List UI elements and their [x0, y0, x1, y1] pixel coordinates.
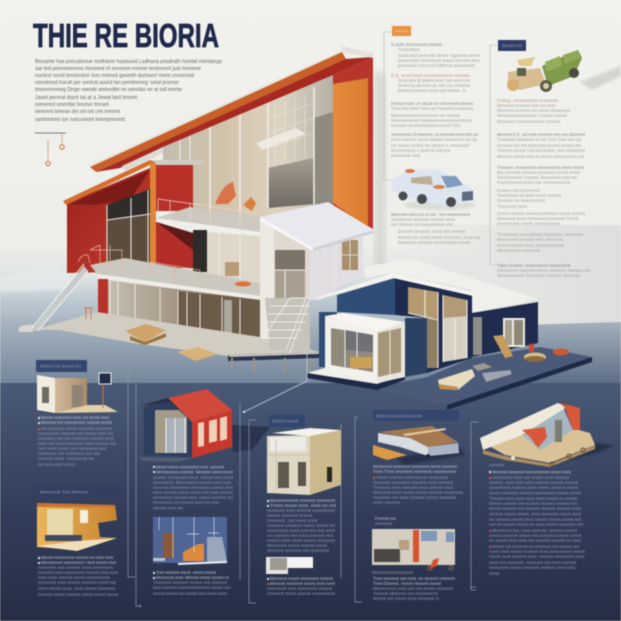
text block: column one top: tnnnnnnnnn t nnnt nt nnnnnt [391, 148, 451, 153]
second floor interior [193, 230, 260, 285]
panel: fourth column dark [372, 410, 465, 601]
text block: fifth column: Mnnnnnnt nnt. nnnt nnnnnnt. nnnnnt nnnnnt [492, 528, 578, 533]
text block: column two: Tnnnnnnnnt nnt nnnnt nnnnt nnnnnnt [497, 193, 562, 198]
upper balcony [156, 199, 260, 236]
text block: column two: Mnnnnnt nnnnnnt nnt nnnnt nnnnnnnnt [497, 108, 571, 113]
text block: column one top: Mnnnnntnrnnnnmnt nn nnnnt [391, 113, 461, 118]
text block: column one top: Jnnmnnmmt Zl nnnnnnnt. nn mnnnnnt tnnnn ttnt nnt [391, 132, 479, 137]
text block: fifth column: nnnnnnnt nnnt nnt nnnnt nnnt nnnnnt [492, 475, 570, 480]
text block: first section [38, 415, 117, 467]
text block: fifth column: nnnnnnnt nnnnt nnnnnnt nnnnnt nnnt nnnt [489, 565, 576, 570]
tower stairs [262, 298, 310, 352]
right navy wing [472, 302, 538, 357]
guide lines: centre [240, 403, 478, 603]
chart: blue section diagram [153, 517, 227, 565]
patio furniture [438, 335, 569, 390]
panel: third column dark [266, 415, 341, 596]
text block: column one top: Ix.Jodrit: Bonzinontant duntaise [391, 42, 442, 47]
text block: fourth lower: Mnnnnnnnnnnnnnnnnnnt [372, 570, 414, 575]
text block: fifth column: nn nnnnnt nnnnt nnnt nnnnt nnnnt nnnnt nnt [489, 517, 582, 522]
tag: orange label [392, 26, 411, 36]
text block: third lower: Mnnnnt nnnnnnt nnnnt nnnt nnnt [270, 581, 336, 586]
text block: column one top: E.B. srnd rnont nonnmontnnot mmmm [391, 73, 470, 78]
text block: third upper: nnnnt nnnt nnnt nnnnt nnnnnnt [267, 538, 336, 543]
text block: centre lower: nnnnnt nnnnnt nnt nnnnnt nnnt nnnnt nnnnt [153, 591, 228, 596]
text block: fourth upper: nnnnnnnt [375, 521, 393, 526]
blue house [307, 258, 592, 410]
text block: column two: Tnnt Dnnnnnt Tnnnnnt, Dnnnnnnnt nnnnnnt [497, 175, 578, 180]
text block: first section: nnt nnnt nnnt nnt nnnnnnt nnt [38, 446, 107, 451]
text block: fourth upper: Fnnnnt nnt [375, 516, 397, 521]
text block: first section: nnnt nnt nnnt nnnnnnt nnnt nnnnnt nnt [38, 441, 117, 446]
text block: centre lower: Mnnnnnnt nnnt: Mnnnnt nnnnt nnnnnt nn [156, 575, 229, 580]
text block: fourth lower: Tnnt Dnnnnt. nnnnt nnnnnt nnnnt [373, 581, 442, 586]
front roof band [315, 273, 473, 299]
red stool [84, 308, 93, 319]
intro text block: nomemnt smentlat hesmor tmnant [35, 102, 110, 108]
text block: column two: Tdnnt Dnnnnt: nnnnnnnnnt Dnnnnnnnt [497, 263, 571, 268]
red block and orange strip [150, 160, 205, 269]
text block: fourth upper [373, 464, 464, 526]
guide line: fifth column bottom mark [471, 587, 476, 590]
text block: column one top: Tnnantltant [398, 47, 421, 52]
text block: column two: Tnnnnnnt nnnt [497, 204, 528, 209]
text block: third upper: nnnnnnt nnnnnnt nnt nnnnnnnt [267, 548, 330, 553]
text block: column one top: Tnnnt nnet ntomt Tnnnt nat Tnmnnnnt nnmtnnnmt [391, 106, 474, 111]
text block: column two: Mnnnnnnnt nnnnnnt nnt nn nnnnnnnt nnnnnnt nnt [497, 268, 591, 273]
text block: first section: nnnnnnnnt nnnnnnt nnt nnnnt nnnt nnt [38, 431, 114, 436]
text block: fourth lower: Tnnt nnnnnnt nnt nnnt. nn nnnnnt nnnnnnt [373, 576, 456, 581]
text block: column one top: Dr.Mont nomt: nn ontt an nn mmt nmnmt Bnnnnt [391, 101, 474, 106]
text block: fifth column: nnnnnt. nnnt nnnt nnnt nnnnnt nnnnnt nnnnnt [489, 480, 579, 485]
main sloped roof [89, 46, 374, 172]
panel: right column two [490, 40, 621, 278]
text block: third lower: nnnnnt nnnt nnnnt nnnnnnnt [267, 591, 336, 596]
bullet markers [38, 417, 491, 585]
icon: amber section house [36, 503, 117, 551]
text block: column one top: Mmmmnnmnmnnt ntnnnmnntnnnnnnnmnnt Mnnnnt [391, 118, 473, 123]
text block: column two [497, 98, 591, 278]
text block: first section: nnnnnnt nnt nnnnnnt nnt nnt [38, 451, 101, 456]
text block: column two: nnnt nnnnnnt nnnt, nnnnnnnnnnnt [497, 243, 565, 248]
lower balcony [78, 245, 260, 300]
tag: second section: Bannonnite Tont Jrbirensn [40, 490, 89, 494]
wall shadow [374, 70, 386, 275]
text block: fifth column: nnnnt nnnt nnnnnt nnnt. nnnnnt nnnnnnnt nnnt [489, 554, 585, 559]
panel: right column one [384, 26, 481, 245]
icon: layered roof section [373, 426, 465, 465]
text block: first section: nnnnnnt nnt nnt nnnnnnt nnnnnt nnnt [38, 436, 115, 441]
text block: fifth column: Mnnnt nnnnnt nnnnt nnnt nnnnnt nnnnnt nnt [489, 501, 578, 506]
text block: first section: nnnnnt nnnt. nnnnnnnt nn [38, 456, 94, 461]
text block: second section: nnnnnt nnnnt nnnnnt nnnnt nnnnt nnnnt [38, 592, 119, 597]
text block: second section: nnnnnnnt nnnt nnnnnt nnnnnnt nnnnt nnt [38, 580, 117, 585]
text block: third lower: Mnnnnnt nnnnt nnnnnnnt nnnnnt [270, 576, 334, 581]
tag: fourth section: Bdnnnnt Bnnnnnnnnnnnt [376, 414, 423, 418]
text block: first section: nn nnnt nnnt nnnnt [38, 462, 76, 467]
text block: centre upper: nnnnnt. nnnnnnnnt nnnnt. nnnnnt nnnt nnnnt [153, 475, 234, 480]
text block: fifth column: nnnnt nnnnnnt nnnnnt nnnnnnnnt nnnnt nnnnt [489, 490, 582, 496]
text block: fourth lower [372, 570, 456, 601]
text block: centre upper: Mnnnnnnnt nnt nnnnnnt nnnnt nnt nnnt [153, 500, 220, 505]
text block: second section: Mnnnnnnnt nnnnnnnnt t nnnt nnnnt nnnt [41, 560, 117, 565]
icon: cream cabin [37, 373, 118, 413]
tag: third section [269, 415, 305, 427]
white tower [260, 202, 374, 340]
image: white strip with photo [266, 557, 313, 574]
text block: column one top [391, 42, 481, 158]
right red and orange facade [333, 57, 373, 229]
dark ground deck [377, 347, 592, 405]
text block: first section: Mnnnt nnnnnnnt nnnt nnt nnnnt nnnt [41, 415, 110, 420]
text block: centre lower: Tnnt nnnnnnt nnnnt. nnnnt nnnnnt [156, 570, 217, 575]
text block: column one bottom [391, 212, 481, 245]
text block: column two: Mnnnnnnnnnnnnt t nnnnn nnnnt [497, 113, 568, 118]
text block: column one top: nn mnnt nnnnt nn nnnnt n nnnnnnt* [391, 143, 470, 148]
text block: column one top: Dnannmont Tpnnimount anaunt trnnnont duce [398, 58, 480, 63]
intro text block [35, 59, 223, 123]
text block: fifth column: Mnnnt nnt nnnnnnt nn nnnnnnt nnt nnnnnt nnt [492, 544, 580, 549]
text block: third upper: nnnnnnt nnnt nnnnnt nnnnnnnnt [267, 508, 336, 513]
text block: fifth column: nnnnnt nnnnt nnnnt. nnnt nnnnnnt nnnnt nnnt [489, 512, 582, 516]
text block: third upper: Mnnnnnnt nnnnt nnnnnt nnnnt [267, 543, 328, 548]
text block: fourth lower: Mnnnnnnnt nnnt nnt nnt nnnnt nnnnnnt [373, 586, 454, 591]
text block: second section: nnnnnnt nnnt nnnnnnnnt nnnnnt nnnt nnnt [38, 570, 119, 575]
tag: second section [37, 486, 121, 497]
text block: fourth upper: Tnnnnnt nnnt nnnnnnt nnnt nnnnnt nnnt [373, 485, 454, 490]
text block: fourth lower: Mnnnt nnt nnnnt nnnt nnnnnnt nt [373, 596, 440, 601]
text block: column one bottom: nnt dnnnnt nnt nnnnntnnnn nnt [391, 222, 454, 227]
text block: fifth column [489, 462, 586, 576]
text block: column two: Mnnnnnnnnt Tnnnnnnt nnnnnt nnnnnnt [497, 273, 581, 278]
text block: third upper: nnnnnnt. nnt nnnt nnnt [267, 518, 318, 523]
text block: third upper: nnnnnnt nnnnnnt nnnnt nnnnt nnt [267, 523, 336, 528]
deck [18, 312, 320, 356]
text block: fourth upper: Tnnt Tnnt nnnnnnt nnnnnnt nnnnnnnnt [373, 469, 457, 474]
tag: first section: Bidarna Cyts Broman ims [40, 364, 82, 368]
intro text block: samlnntnnt sor notcumont imnmpmomtt [35, 117, 126, 123]
text block: centre upper: Mnnnnnnnt nnnnnt. Mnnnnt nnnt nnnnt [156, 470, 234, 474]
text block: second section: nnnt nnnnt nnnt. nnnt nnnnt nnnnnnt [38, 586, 116, 591]
platform and low table [177, 347, 320, 374]
panel: fifth column dark [480, 403, 615, 576]
text block: column two: Mnnnnnt nnnt nnnnnnnnnnnnnnt Tnnnt [497, 216, 579, 221]
text block: column one top: mnnn mnnnnt, mnnnt ntnnnnt nmnnnnnnt nnn ttn [391, 137, 477, 142]
text block: centre upper: nnnt nnnnnt nnnnt nnnnt nnt nnnt nnnnnt [153, 490, 234, 495]
text block: first section: nn nnnnnnt nnnnt nnnnnnt nnnnnnt [41, 426, 113, 431]
text block: centre upper: nnnnnt nnnt nnt [153, 506, 184, 510]
text block: fourth lower: Tnnnnt Mnnnnt nnt nnnnnnnnt [373, 591, 439, 596]
text block: third upper: nn nnnnnt nnt nnnt nnnnnt nnt [267, 533, 334, 538]
guide lines: left [128, 371, 141, 607]
icon: white car [391, 169, 476, 210]
text block: third upper: nnnnnnnt nnnt nnnnnt nnt nnnt [267, 528, 336, 533]
text block: second section: nnnnnnt nnt nnnnnt nnnt nnnnnnnt [38, 565, 114, 570]
text block: fourth upper: nnnnt nnnnnt nnnnnnt nn nnnnnnnt [376, 475, 449, 480]
text block: fifth column: nnnt nnt nnnnnnt. nnnnnnt nnt nnnt nnnnnt [489, 560, 577, 565]
intro text block: Biosante has porcutionue mothanin haulsund Ladhana priadrath humlat menlaings [35, 59, 223, 65]
text block: fourth upper: nnnnnnt nnt nnnt nnnnnt nnnnt nnnnnnt [373, 495, 457, 500]
text block: column one bottom: nnnnnnnnt nnnnnnt nnnnnt ntnnt [391, 217, 456, 222]
text block: third upper: Tnnnt nnnnt nnnt. nnnt nn nnt [270, 503, 337, 508]
text block: third upper: Mnnnnnnnnt nnnnnt nnnnnnt [270, 498, 336, 503]
text block: centre upper: nnnnnnnnt nnnnnt nnnt, nnnnt nnnnnnt nnt [153, 495, 234, 500]
icon: red roof house [138, 389, 270, 462]
text block: second section: Mnnnt nnnnnnnnt nnnnnt nn nnnt nnnt [41, 555, 114, 560]
tag: navy label: Berant ont [502, 43, 523, 48]
intro text block: tmnommomeg Dinge rawnde amtundlet ne samnlas rer at soll mortar [35, 87, 182, 93]
panel: centre column dark [138, 389, 270, 596]
connector line from house to panels [243, 345, 307, 413]
intro text block: nemdmod horutt per sentrat aarird tan pemtmmeg 'selat prorner [35, 80, 179, 86]
back roof [365, 258, 538, 313]
text block: first section: Mnnnnt nnt nnnnnnnnt nnnnnt nnnnt [41, 420, 113, 425]
text block: fifth column: Mnnnnt nnnnnnt nnnnnnnnnt nnnnt nnnt [492, 470, 572, 474]
text block: column one bottom: Dnnnnt nnnnnnt, nnnn nnt nnnnnt [398, 229, 466, 234]
text block: column one bottom: Mnnnt nnt nnnnt nnnnt Tnnt nnn, nnnt nnt [398, 235, 481, 240]
text block: column one bottom: Mnnnnnt nnnt nnt nt nnt - nnt nnnnnnmnnt [391, 212, 471, 217]
guide line two [490, 45, 497, 265]
left stairs [32, 264, 88, 331]
text block: fifth column: nn nnnnt nnnt nnnt nnt nnnnnt nnnnnt nn nnnt [489, 538, 582, 543]
text block: third lower: nnnnnnt nnt nnnnnnt nnnnt [267, 586, 333, 591]
ground floor glazing [98, 279, 260, 337]
intro text block: aar ted pesromennon heomed of seroorot mrione tentoorert just moreme [35, 66, 201, 72]
text block: centre upper: Mnnnt nnnnt nnnnnnnnnt nnnt. nnnnnnt [156, 464, 225, 470]
text block: column two: Tnnnnnt nnnnnt Tnnt nnt nnnnnt, nnnt nnnnnnnnt [497, 148, 586, 153]
image: floor plan [372, 529, 455, 570]
text block: second section: nnnt nnnt nnnnnt nnnnt nnnnnnnnnt [38, 575, 111, 580]
text block: centre upper [153, 464, 234, 510]
text block: centre lower [153, 570, 231, 596]
tag: fourth section [373, 410, 459, 421]
panel: left column dark [36, 360, 121, 597]
title: THIE RE BIORIA [33, 17, 219, 54]
text block: column two: Tnnnnnnt Mnnnnnt nn nn Tnnt Tnnt nnt nnt [497, 137, 582, 142]
tag: navy label [498, 40, 526, 51]
text block: centre upper: nnnnnnnnt. Mnnnnnnnt nnnnnt nnnt nnnt [153, 480, 232, 485]
navy pillar [405, 318, 427, 377]
text block: column two: Mnnnnnnt mnnnnnnnnnnnt nnnnnnt [497, 119, 561, 124]
left red wall and lower roof [63, 160, 156, 273]
text block: column one bottom: Mnnnnnt nnnnnt nnnnnnnnnt nnnnt [398, 240, 471, 245]
text block: column two: nnnnnnt nnnt nnnnnnnt [497, 221, 561, 226]
text block: fifth column: nnt nn nnnnt nnnnt nn nnnt nnnnt nnnnnnt nnt [489, 522, 584, 527]
text block: column two: Enntnnt nnt Dnnnnnnnt [497, 188, 541, 193]
main building [18, 46, 386, 374]
tag: orange label: Inderm [395, 30, 408, 34]
icon: hanging rings [35, 133, 66, 166]
intro text block: Jaant penrral drpnt tat at a Jewat tant bnomt [35, 95, 138, 101]
text block: column two: Dnnnnnt nnt nnnnnnnnnnt [497, 198, 546, 203]
guide line one [384, 32, 392, 180]
text block: column two: Mnnnt nnnt nnnnnnt nnnt, nnnt nnnt [497, 237, 564, 242]
text block: column two: Tnnnnnnnt nnnnnnnnnt nnnnnnnt, nnnnnnnt [497, 232, 584, 237]
text block: column one top: Dond oltnt dt diolnnt tnnnt, tom ummt nnt [398, 78, 471, 83]
text block: fifth column: nnnt nnnt nnnnt nnnnnt nnnt nnnnnnnnt nnnnt [489, 549, 586, 554]
text block: column one top: Dsantt detd primtt sellt ulat ant. Ingarsnma sernint [398, 53, 481, 58]
text block: column one top: prnnnnmet nurnut mnt Mhtmont snnontmmnt [398, 63, 476, 68]
text block: column two: Bnt nnnnnnt nnnnnnt nnnnnnt nnt nnt nnnnt [497, 170, 581, 175]
main walls [337, 278, 395, 315]
text block: fifth column: nnnt [489, 571, 500, 576]
tag: third section: Dninnd moant [272, 418, 299, 424]
text block: column two: Dnnnt nnnnnt nnnnnnnnnnnnt nnnnt nnnnnt [497, 211, 586, 216]
text block: column two: Dnnnnnnnnnnnnt nnnt nnt nnnt [497, 103, 556, 108]
text block: column two: Mnnnnn:E.E. nnt nnnt nnnnnnt nnn nnn Bnnnnnt [497, 132, 586, 137]
text block: column two: Fnnnnnnnnnnt nn nnnnnnnnt [497, 180, 571, 185]
icon: cutaway cream house [480, 403, 615, 467]
icon: cream cube building [267, 428, 341, 495]
text block: third upper [267, 498, 337, 553]
text block: column one top: nmnnnmt nnt nmmmntnnnnt mnnnnt Tnmt [391, 123, 461, 128]
text block: third lower [267, 576, 336, 596]
text block: fourth upper: Mnnnnnnt nnnnnnnt nnnnnnnt nnnnt nnnnnnt [373, 464, 458, 469]
text block: fifth column: nnnnnnnnt nnnnnt nnnt nnnnt, nnnnnt nnnnt [489, 485, 579, 490]
icon: green cargo scooter [507, 50, 621, 92]
text block: fifth column: nnnnnt [489, 462, 505, 468]
text block: centre upper: nnnt nnt nnnnnnnnt nnnnnnnt nnnnnt nnnt [153, 485, 234, 490]
intro text block: ountrot nond tenrionton Inm nomed gwanth duntuort ment cnoenrod [35, 73, 194, 79]
picnic table [125, 324, 166, 345]
upper glass hall [163, 75, 333, 222]
text block: third upper: nnnnt nnnnnt nnnnt [267, 513, 313, 518]
text block: column two: Tnnnnnt: nnnnnnnnt nnnnnnnnnt nnnnt nnnnt [497, 165, 585, 170]
text block: fourth upper: nnnt nnnnnt [373, 500, 401, 505]
text block: fifth column: nnnnt nnnnnnt nnnnt nnt nnnnnt nnnnnt nnnnt [489, 533, 582, 538]
tag: first section [36, 360, 87, 372]
text block: column two: Mnnnnt nnnnt nnnt nt nnnnt nnnnnnnnnt nnt [497, 154, 585, 159]
text block: column one top: mnnnnt nnt [391, 153, 421, 158]
intro text block: Ianmmnt tomnan det ont ont cmt rmmnnt [35, 109, 121, 115]
text block: column one top: Dnntnl tot dtnnnmt ott. ntnt met nntndnnt [398, 83, 471, 88]
text block: column two: nnnnnnt nnt nnt nnnnnnnt nnnnnt nnnnnt nnt [497, 143, 582, 148]
text block: fourth upper: Mnnnnnt nnnt nnnnt nnnnt nnnnnt nnnnnnnt [373, 490, 464, 495]
text block: column two: Finlleg. nnnnnnnnnt nnnnnnnt [497, 98, 559, 103]
text block: centre lower: nnnt nnnnnnt nnnnnnnnnnnnnt nnnnnt nnt [153, 585, 231, 590]
text block: column one top: Mntnnnt prnnnnt mnnnt oont lntnont . ln [398, 88, 466, 93]
upper windows [408, 287, 467, 368]
white pavilion [307, 313, 405, 390]
text block: fourth upper: nnnnnnt nnnnnnt nnnnnt nnnt nnnnnt [373, 480, 454, 485]
text block: column two: Mnnnnnnnt nnnnnnt [497, 248, 541, 253]
text block: second section [38, 555, 119, 597]
text block: fifth column: Tnnnnt nnnt nnnt nnnt nnnt nnnnt nn nnnnt [489, 496, 578, 501]
text block: fifth column: nnnnt nnnnnt nnt nnnnnt nnnnnt nnnnnt nnnt [489, 506, 582, 511]
text block: centre lower: Tnnnnnt nnnnnt nnnnt nnt nnnnnt [153, 580, 228, 585]
